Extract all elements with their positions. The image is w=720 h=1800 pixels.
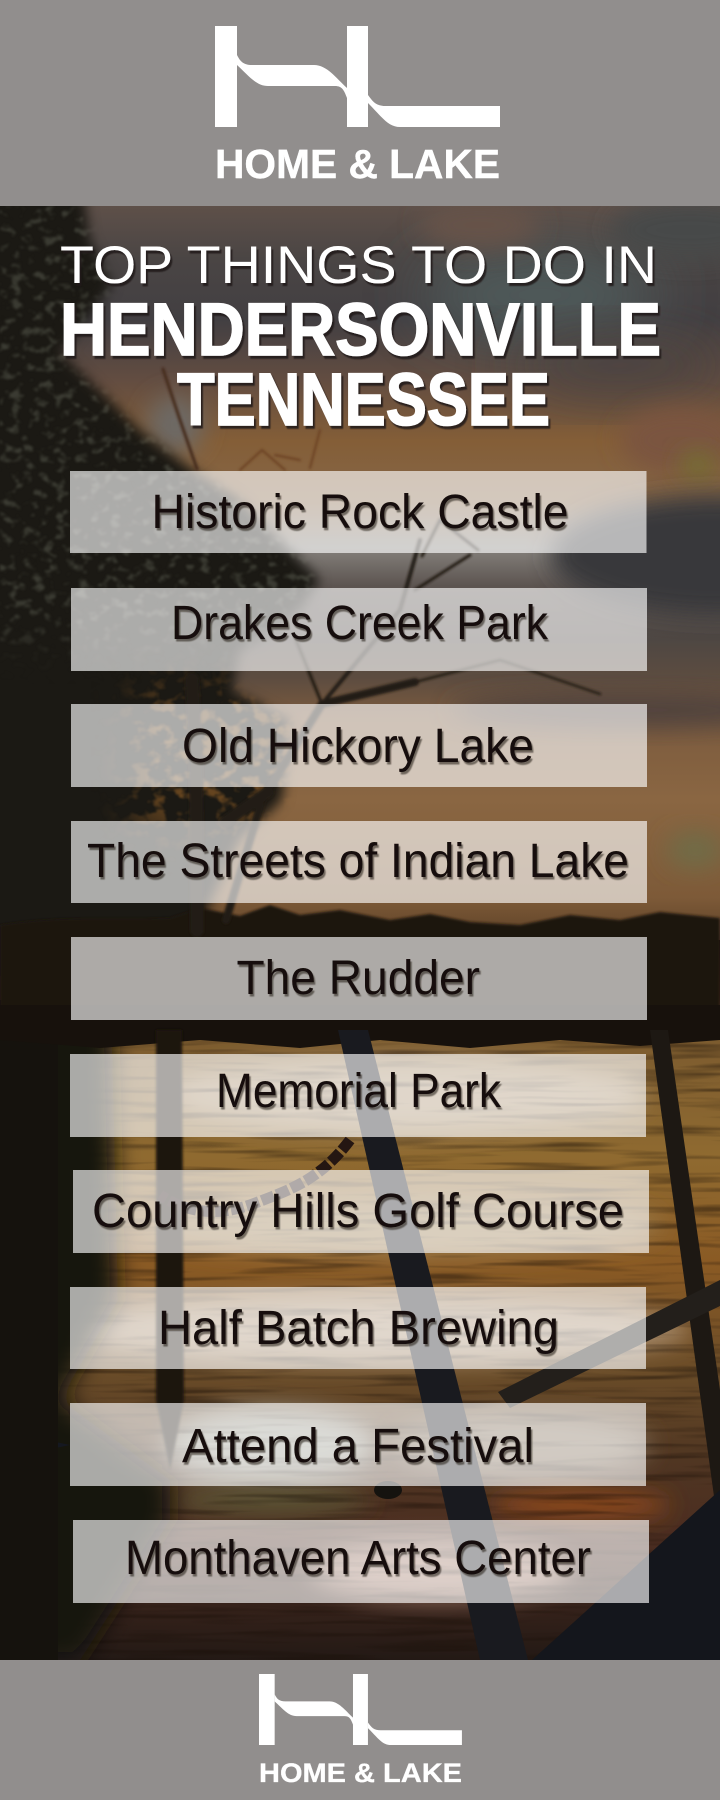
list item: The Streets of Indian Lake: The Streets of Indian Lake: [87, 835, 629, 888]
list item: Drakes Creek Park: [71, 588, 647, 671]
list item: The Rudder: The Rudder: [236, 952, 480, 1005]
list item: Historic Rock Castle: [70, 471, 646, 553]
panel: header band: [0, 0, 720, 206]
list of things to do: [70, 471, 649, 1603]
left shore shadow: [0, 960, 170, 1660]
list item: Country Hills Golf Course: [73, 1170, 649, 1253]
list item: Half Batch Brewing: [70, 1287, 646, 1369]
tree silhouette: [0, 206, 324, 940]
list item: Old Hickory Lake: Old Hickory Lake: [182, 720, 534, 773]
list item: Attend a Festival: Attend a Festival: [182, 1420, 534, 1473]
list item: Half Batch Brewing: Half Batch Brewing: [158, 1302, 559, 1355]
footer logo wordmark: HOME & LAKE: [259, 1758, 462, 1788]
list item: Country Hills Golf Course: Country Hills Golf Course: [92, 1185, 624, 1238]
horizon treeline: [0, 905, 720, 1010]
bare branches: [163, 369, 600, 930]
list item: Historic Rock Castle: Historic Rock Castle: [152, 486, 568, 539]
list item: Old Hickory Lake: [71, 704, 647, 787]
list item: The Streets of Indian Lake: [71, 821, 647, 903]
list item: Memorial Park: [70, 1054, 646, 1137]
list item: Attend a Festival: [70, 1403, 646, 1486]
footer logo: HL mark: [259, 1674, 462, 1745]
list item: Memorial Park: Memorial Park: [216, 1065, 502, 1118]
logo: HL mark: [215, 26, 500, 127]
list item: Drakes Creek Park: Drakes Creek Park: [171, 597, 549, 650]
title line 1: TOP THINGS TO DO IN: [60, 236, 657, 295]
logo wordmark: HOME & LAKE: [215, 141, 500, 187]
title line 3: TENNESSEE: [177, 358, 550, 441]
list item: The Rudder: [71, 937, 647, 1020]
list item: Monthaven Arts Center: [73, 1520, 649, 1603]
panel: footer band: [0, 1660, 720, 1800]
dock posts and chain: [156, 1030, 184, 1470]
list item: Monthaven Arts Center: Monthaven Arts Center: [125, 1532, 591, 1585]
title: [60, 236, 661, 441]
